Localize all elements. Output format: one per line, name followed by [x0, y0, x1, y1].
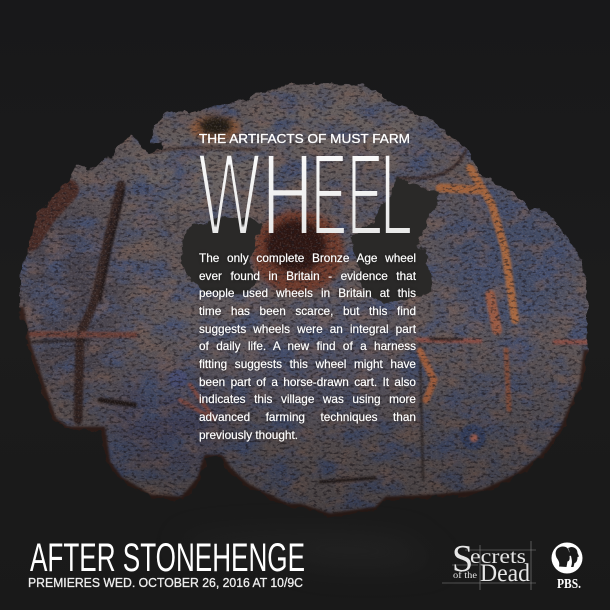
title: Wheel: H: [262, 128, 313, 260]
body text: indicates this village was using more: [199, 392, 416, 406]
body text: of daily life. A new find of a harness: [199, 339, 416, 353]
faint wheel reflection: [180, 533, 440, 567]
hole: right: [352, 177, 440, 303]
hole: left: [180, 216, 262, 295]
body text: ever found in Britain - evidence that: [199, 269, 416, 283]
body text: time has been scarce, but this find: [199, 304, 416, 318]
body text: The only complete Bronze Age wheel: [199, 251, 416, 265]
title: Wheel: L: [380, 129, 413, 260]
body text: [198, 251, 417, 442]
title: Wheel: E: [347, 130, 383, 261]
body text: fitting suggests this wheel might have: [199, 357, 416, 371]
logo: Secrets of the Dead: Dead: [480, 560, 530, 587]
title: Wheel: W: [198, 129, 260, 261]
body text: suggests wheels were an integral part: [199, 322, 416, 336]
top crater: [190, 115, 240, 141]
title: Wheel: E: [311, 130, 347, 261]
show title: After Stonehenge: AFTER STONEHENGE: [30, 536, 305, 580]
rust streaks and seams: [25, 148, 587, 482]
lower rust spot: [169, 370, 486, 450]
body text: people used wheels in Britain at this: [199, 286, 416, 300]
logo: PBS: [552, 542, 582, 592]
title: Wheel: [198, 128, 413, 261]
overline: The Artifacts of Must Farm: THE ARTIFACTS OF MUST FARM: [199, 131, 410, 146]
centre shaft, rust: [252, 210, 344, 294]
body text: previously thought.: [199, 428, 298, 442]
logo: Secrets of the Dead: S: [452, 538, 473, 580]
logo: Secrets of the Dead: [442, 538, 536, 590]
body text: been part of a horse-drawn cart. It also: [199, 375, 416, 389]
logo: Secrets of the Dead: ecrets: [470, 546, 526, 568]
logo: PBS: PBS.: [557, 577, 581, 592]
rim: [20, 307, 587, 517]
wheel artifact: [18, 82, 589, 518]
logo: Secrets of the Dead: of the: [453, 570, 477, 580]
premiere date: PREMIERES WED. OCTOBER 26, 2016 AT 10/9C: [28, 576, 303, 590]
body text: advanced farming techniques than: [199, 410, 416, 424]
